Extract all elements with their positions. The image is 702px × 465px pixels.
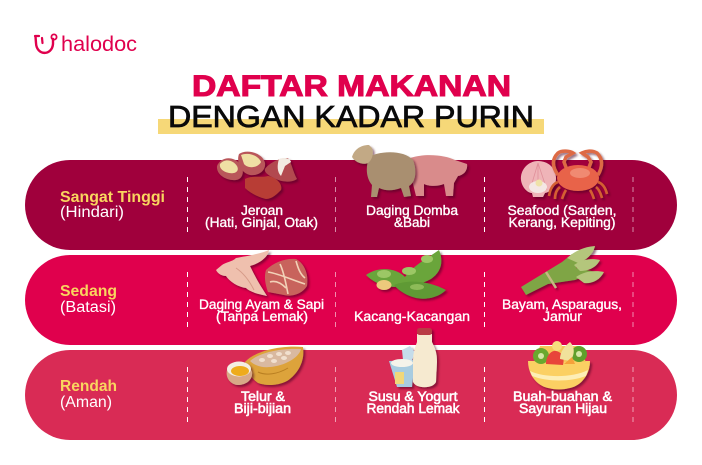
label: rendah (60, 378, 117, 411)
text: susu: Rendah Lemak (366, 401, 460, 416)
title highlight bar (158, 119, 544, 134)
text: daging ayam dan sapi (199, 297, 324, 324)
text: susu: Susu & Yogurt (368, 389, 458, 404)
text: daging ayam dan sapi: (Tanpa Lemak) (216, 309, 308, 324)
icon: chicken (216, 250, 269, 296)
text: bayam (502, 297, 622, 324)
icon: egg (227, 362, 252, 385)
title (158, 70, 544, 134)
label: rendah: (Aman) (60, 394, 112, 411)
icon: milk bottle (413, 328, 437, 387)
label: sangat tinggi: Sangat Tinggi (60, 189, 165, 206)
panel: rendah (25, 328, 677, 440)
text: seafood (508, 203, 616, 230)
label: sedang: Sedang (60, 283, 117, 300)
text: buah: Buah-buahan & (513, 389, 612, 404)
label: sedang: (Batasi) (60, 299, 116, 316)
logo: halodoc: halodoc (61, 33, 137, 56)
title line 1: DAFTAR MAKANAN (192, 70, 511, 103)
text: daging domba (366, 203, 459, 230)
text: jeroan (205, 203, 318, 230)
title line 2: DENGAN KADAR PURIN (168, 99, 534, 134)
panel: sangat tinggi (25, 145, 677, 250)
text: telur: Biji-bijian (234, 401, 291, 416)
text: kacang-kacangan: Kacang-Kacangan (354, 309, 470, 324)
icon: scallop (521, 161, 556, 197)
icon: grain bowl (245, 347, 303, 385)
text: telur (234, 389, 291, 416)
icon: fruit bowl (528, 341, 590, 390)
text: bayam: Jamur (543, 309, 583, 324)
text: jeroan: Jeroan (241, 203, 283, 218)
label: sedang (60, 283, 117, 316)
icon: asparagus (521, 246, 604, 295)
label: sangat tinggi (60, 189, 165, 221)
text: daging ayam dan sapi: Daging Ayam & Sapi (199, 297, 324, 312)
text: buah: Sayuran Hijau (519, 401, 607, 416)
icon: sheep (352, 145, 415, 197)
label: sangat tinggi: (Hindari) (60, 204, 124, 221)
label: rendah: Rendah (60, 378, 117, 395)
icon: pig (410, 155, 467, 196)
icon: yogurt (389, 346, 415, 387)
panel: sedang (25, 246, 677, 345)
text: bayam: Bayam, Asparagus, (502, 297, 622, 312)
icon: beef (265, 259, 307, 296)
text: seafood: Kerang, Kepiting) (508, 215, 616, 230)
text: seafood: Seafood (Sarden, (508, 203, 616, 218)
text: jeroan: (Hati, Ginjal, Otak) (205, 215, 318, 230)
icon: crab (549, 151, 607, 199)
text: buah (513, 389, 612, 416)
text: susu (366, 389, 460, 416)
text: telur: Telur & (241, 389, 285, 404)
icon: edamame (366, 250, 446, 299)
text: daging domba: &Babi (394, 215, 430, 230)
icon: organ meats (217, 152, 297, 199)
text: daging domba: Daging Domba (366, 203, 459, 218)
